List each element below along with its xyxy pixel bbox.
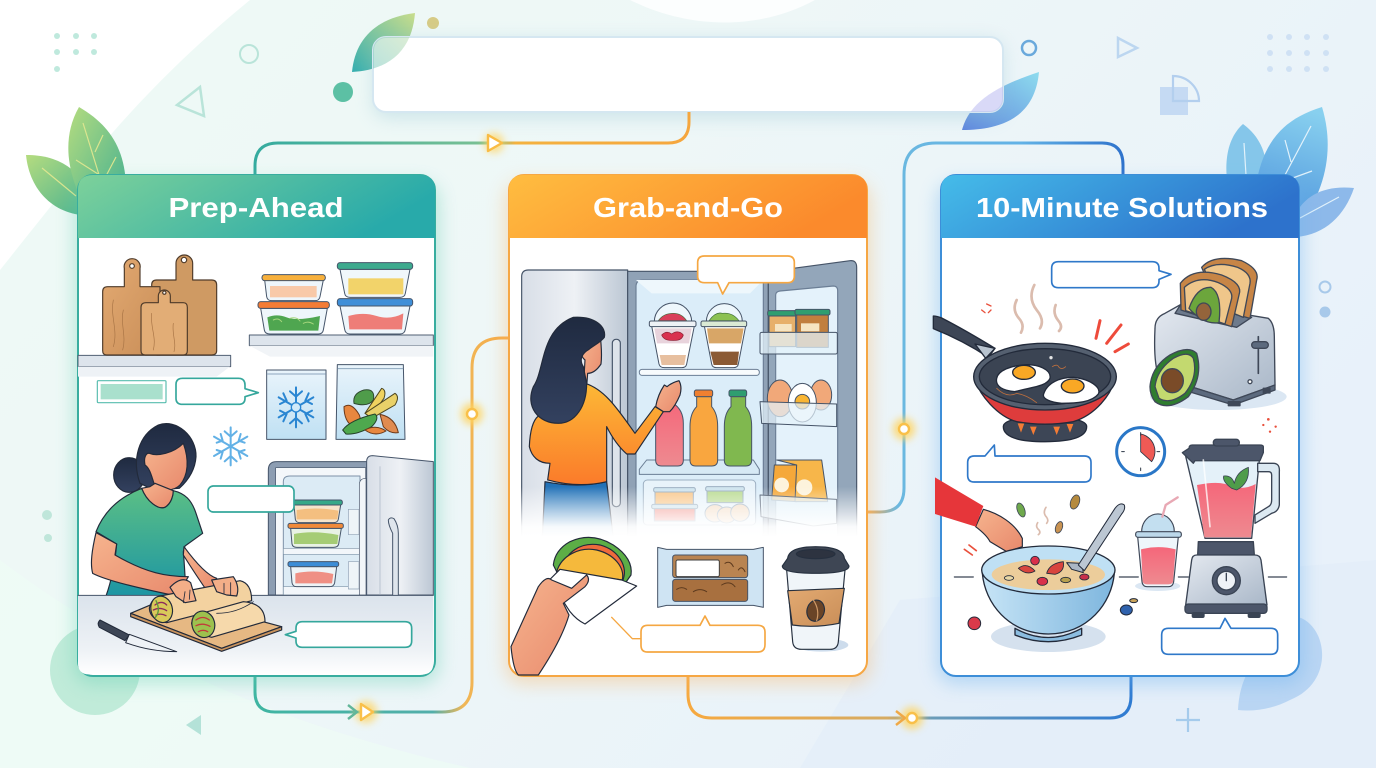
steam and sparks [982,285,1128,352]
decorative shapes: top right [962,34,1329,130]
connector: panel two to panel three [688,676,1131,729]
callout: toast [1052,262,1171,288]
door items: cartons [760,460,837,526]
fridge [268,456,433,595]
decorative leaves: right [1226,107,1354,237]
panel one illustration [78,255,433,674]
toaster with avocado toast [1150,258,1287,410]
woman preparing wraps [91,424,217,596]
bottles [656,390,752,466]
callout: pan [968,445,1091,482]
door items: jars [760,309,837,354]
callout: bags [176,378,258,404]
icon: snowflake [214,427,247,465]
coffee cup [782,547,849,652]
callout: wraps [285,622,412,647]
connector: panel one to panel two [255,338,510,723]
blender [1182,439,1279,617]
parfait cups [649,303,747,368]
panel two illustration [511,256,865,675]
callout tag [97,381,166,403]
fridge [522,261,857,537]
title panel [366,34,1010,124]
panel three illustration [933,258,1287,654]
heading: Prep-Ahead [78,175,435,238]
freezer bag: vegetables [336,365,405,439]
frying pan with eggs [933,316,1116,442]
panel: 10-Minute Solutions [933,175,1303,684]
knife [98,620,177,652]
counter [78,595,433,674]
fade out at fridge base [512,487,865,537]
connector: panel two up to panel three [867,143,1123,512]
wraps on board [131,577,282,651]
scattered berries [968,599,1138,630]
taco in hand [511,537,637,675]
woman at fridge [529,317,681,538]
heading: Grab-and-Go [509,175,867,238]
arm stirring [935,477,1032,555]
cutting boards [103,255,217,355]
drawer [643,480,756,525]
shelf left [78,355,231,377]
shelf right [249,335,433,357]
heading: Prep-Ahead: Prep-Ahead [168,192,344,223]
sparks [1262,418,1277,433]
callout: shelf [698,256,794,294]
connector: title to panel one [255,112,689,176]
counter line [954,575,1287,579]
callout: fridge [208,486,294,512]
decorative shapes: sides and bottom [42,282,1330,735]
door items: eggs [760,380,837,427]
pointer and callout: snacks [612,616,765,652]
freezer bag: snowflake [267,370,326,439]
oatmeal bowl [982,504,1125,652]
containers on shelf [258,263,413,334]
snack bar [658,547,763,607]
clock [1117,428,1165,476]
panel: Prep-Ahead [74,175,439,684]
heading: Grab-and-Go: Grab-and-Go [593,192,783,223]
panel: Grab-and-Go [505,175,871,684]
smoothie cup [1135,497,1181,591]
callout: blender [1162,618,1278,654]
heading: 10-Minute Solutions: 10-Minute Solutions [976,192,1268,223]
falling ingredients [1015,494,1082,534]
decorative leaves: left [26,107,126,216]
decorative shapes: top left [54,13,439,116]
heading: 10-Minute Solutions [941,175,1299,238]
shelves [639,369,759,474]
